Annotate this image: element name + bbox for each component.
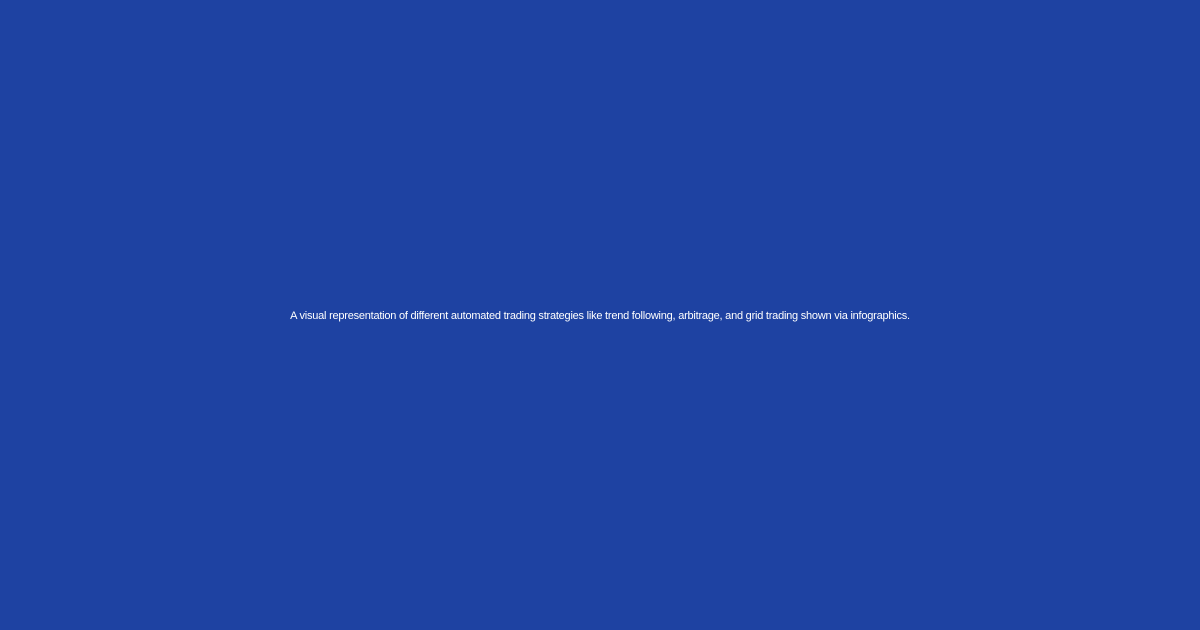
caption text: A visual representation of different automated trading strategies like trend following, arbitrage, and grid trading shown via infographics. [290,310,910,322]
